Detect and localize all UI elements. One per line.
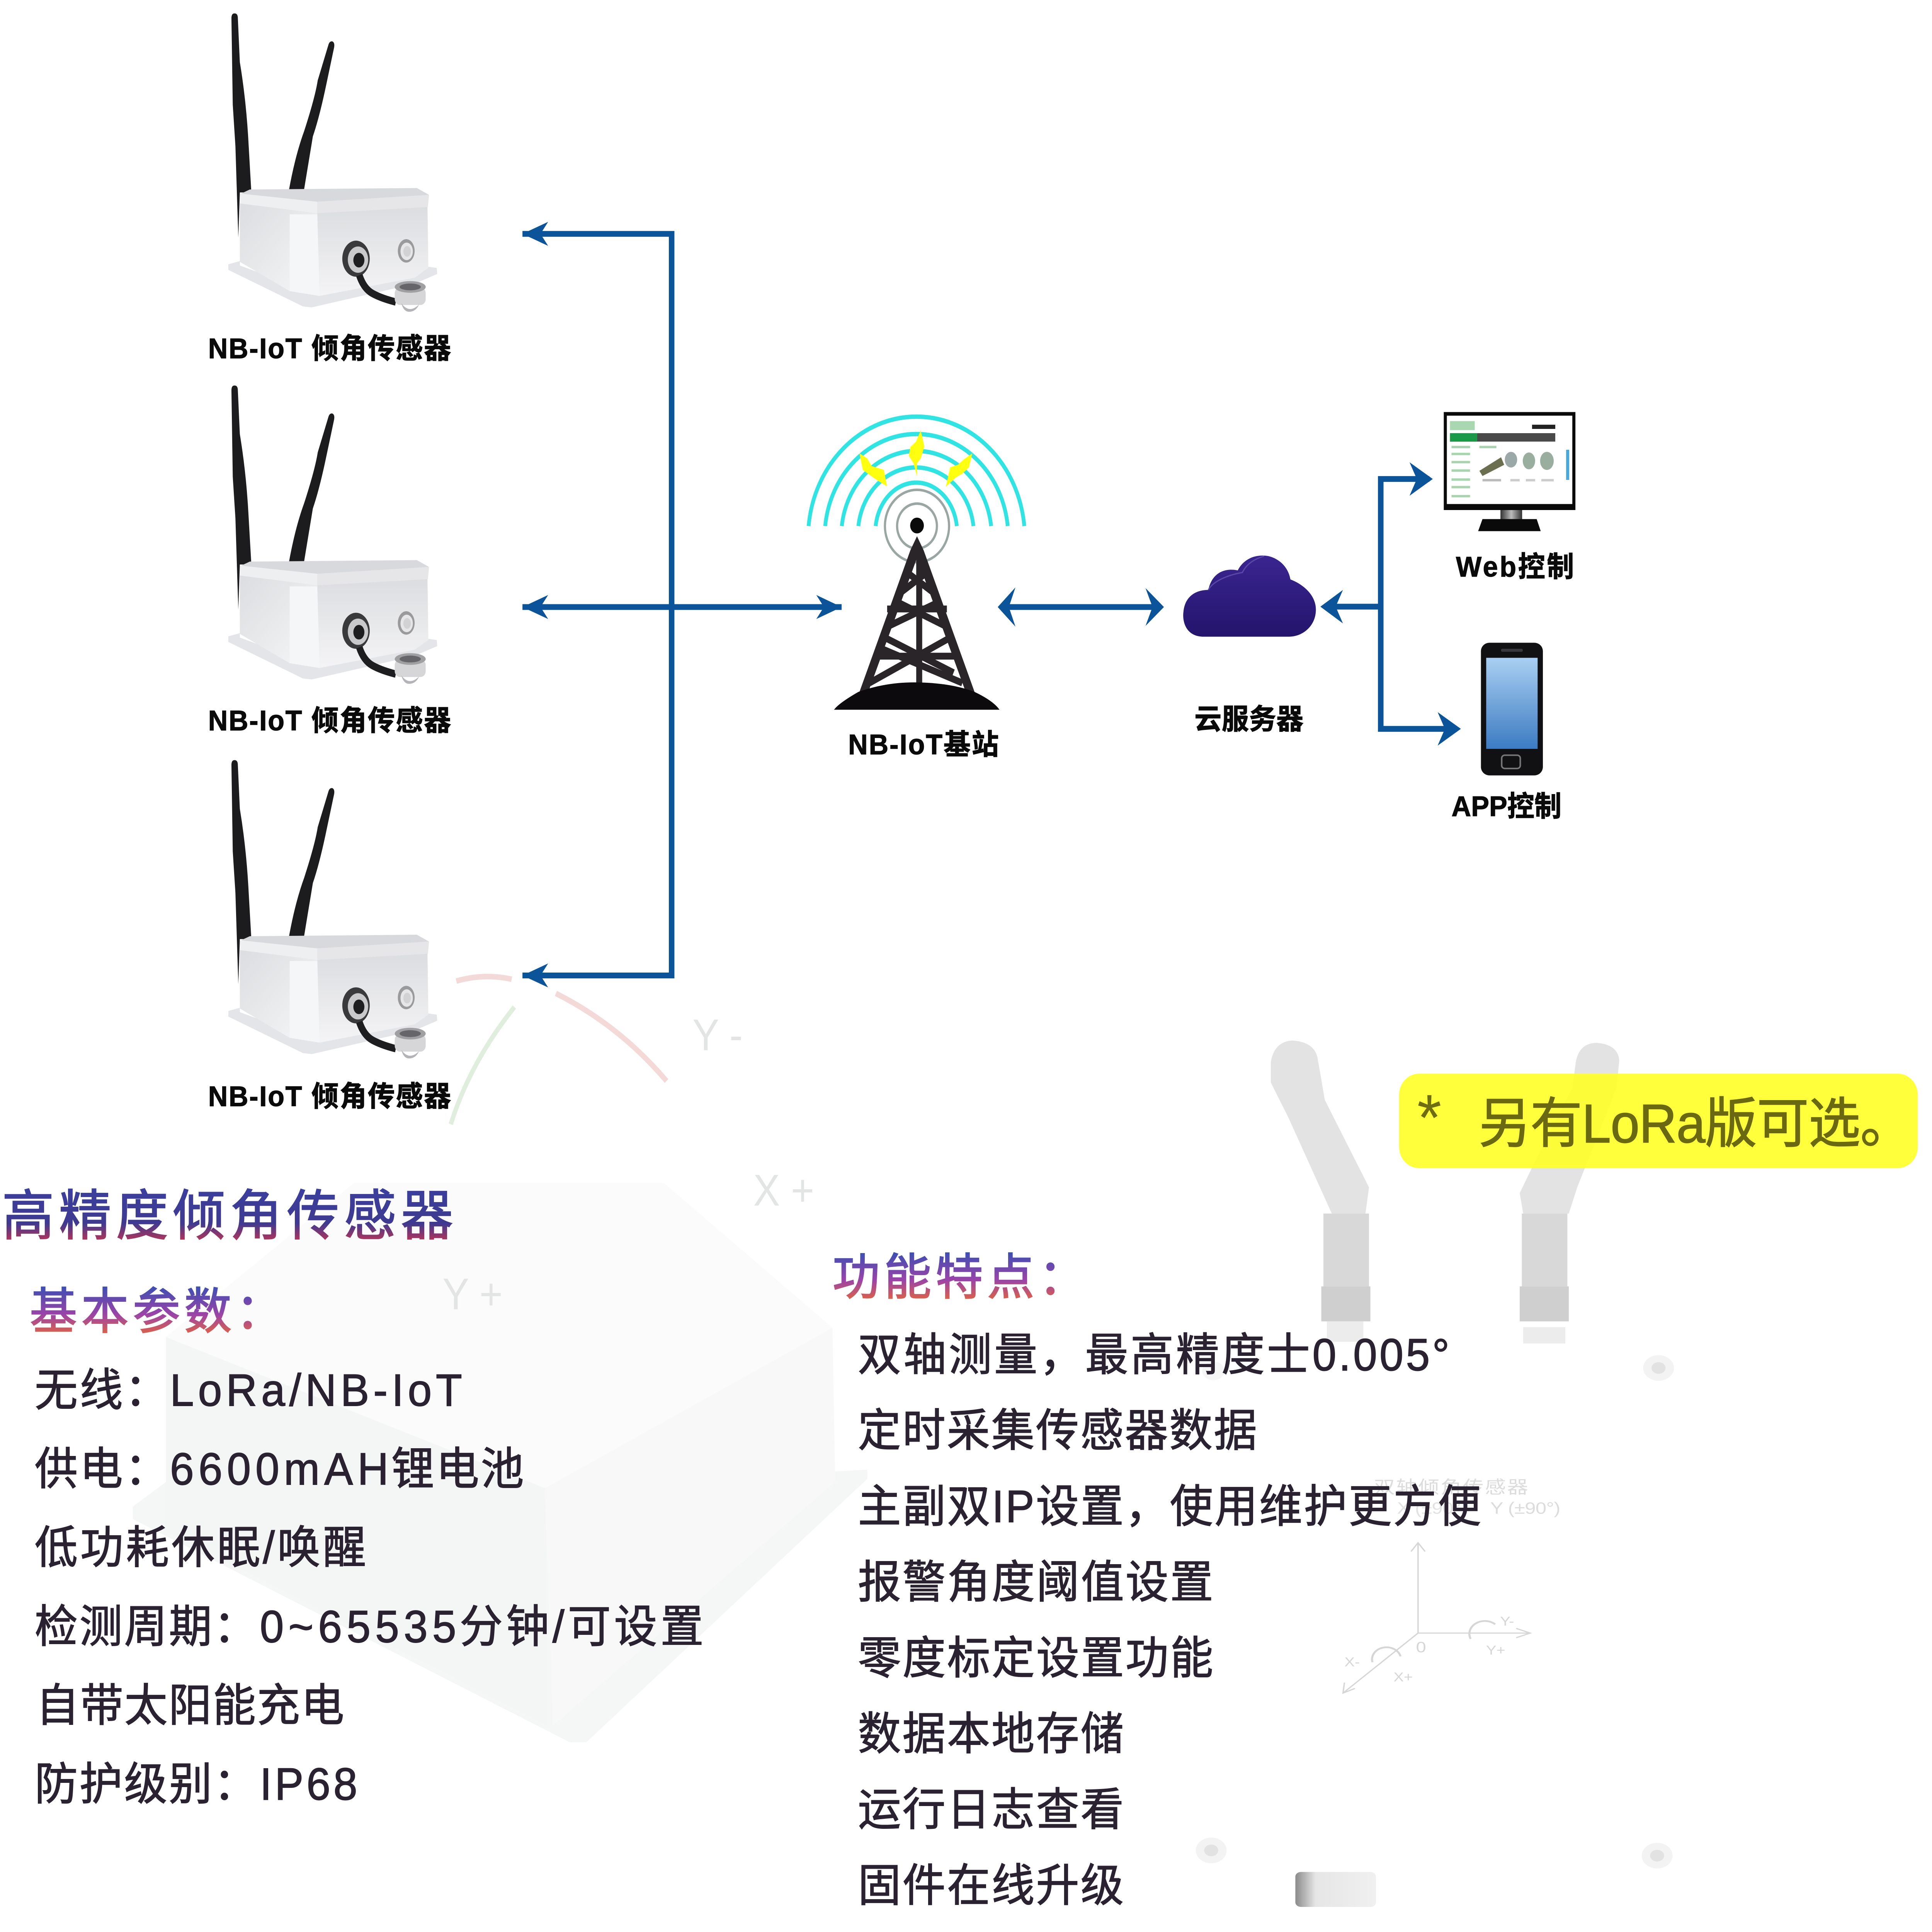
icon: sensor 3 (228, 760, 437, 1058)
faded background: sensor with axis arcs (133, 976, 867, 1742)
arrow: base station to cloud (998, 587, 1164, 627)
spec: low power: 低功耗休眠/唤醒 (35, 1523, 366, 1573)
icon: smartphone (1481, 643, 1543, 776)
faded background: sensor front view with antennas: 双轴倾角传感器 (1374, 1478, 1528, 1497)
panel: features (833, 1250, 1481, 1911)
feature: timed collection: 定时采集传感器数据 (858, 1406, 1257, 1456)
faded background: sensor with axis arcs: X + (753, 1166, 814, 1215)
arrows: cloud to web and app (1320, 462, 1461, 746)
feature: dual axis: 双轴测量，最高精度士0.005° (858, 1330, 1449, 1380)
spec: detection cycle: 检测周期： (35, 1602, 257, 1652)
arrows: sensors to base station (522, 222, 842, 988)
callout: LoRa version available (1399, 1074, 1918, 1168)
spec: detection cycle: 分钟/可设置 (460, 1602, 704, 1652)
faded background: sensor front view with antennas: Y- (1500, 1614, 1514, 1628)
feature: zero calibration: 零度标定设置功能 (858, 1633, 1213, 1684)
spec: detection cycle (35, 1602, 704, 1652)
spec: wireless (35, 1366, 462, 1416)
heading: basic parameters: 基本参数： (30, 1284, 283, 1339)
spec: wireless: LoRa/NB-IoT (170, 1366, 462, 1416)
faded background: sensor front view with antennas: X- (1344, 1655, 1360, 1669)
spec: solar: 自带太阳能充电 (36, 1681, 344, 1731)
spec: detection cycle: 0~65535 (260, 1602, 456, 1652)
faded background: sensor front view with antennas (1196, 1041, 1674, 1907)
feature: alarm threshold: 报警角度阈值设置 (858, 1558, 1213, 1608)
spec: wireless: 无线： (35, 1366, 168, 1416)
feature: local storage: 数据本地存储 (858, 1709, 1124, 1759)
icon: sensor 1 (228, 14, 437, 312)
icon: cloud server (1183, 556, 1316, 637)
heading: features: 功能特点： (833, 1250, 1086, 1305)
feature: firmware upgrade: 固件在线升级 (858, 1861, 1124, 1911)
label: web control: Web控制 (1456, 551, 1574, 583)
spec: protection: IP68 (260, 1759, 357, 1810)
spec: power: 锂电池 (391, 1444, 524, 1495)
icon: sensor 2 (228, 386, 437, 684)
spec: protection (35, 1759, 357, 1810)
feature: run log: 运行日志查看 (858, 1785, 1124, 1835)
callout: LoRa version available: * (1417, 1081, 1442, 1155)
spec: power: 供电： (35, 1444, 168, 1495)
spec: protection: 防护级别： (35, 1759, 257, 1810)
spec: power (35, 1444, 524, 1495)
callout: LoRa version available: 另有LoRa版可选。 (1479, 1094, 1912, 1154)
faded background: sensor with axis arcs: Y + (442, 1269, 503, 1319)
feature: dual IP: 主副双IP设置，使用维护更方便 (858, 1482, 1481, 1532)
faded background: sensor front view with antennas: 0 (1416, 1639, 1426, 1656)
icon: web monitor (1444, 412, 1575, 531)
title: 高精度倾角传感器 (2, 1186, 453, 1247)
label: sensor 1: NB-IoT 倾角传感器 (208, 333, 451, 365)
label: sensor 3: NB-IoT 倾角传感器 (208, 1081, 451, 1112)
label: app control: APP控制 (1452, 791, 1561, 823)
spec: power: 6600mAH (170, 1444, 389, 1495)
label: base station: NB-IoT基站 (848, 729, 999, 761)
faded background: sensor front view with antennas: X (±90°) (1397, 1499, 1467, 1517)
icon: NB-IoT base station tower (809, 417, 1024, 710)
faded background: sensor with axis arcs: Y - (692, 1010, 743, 1060)
faded background: sensor front view with antennas: Y+ (1486, 1643, 1505, 1657)
faded background: sensor front view with antennas: Y (±90°) (1490, 1499, 1560, 1517)
label: sensor 2: NB-IoT 倾角传感器 (208, 705, 451, 736)
panel: basic parameters (30, 1284, 704, 1810)
label: cloud server: 云服务器 (1194, 704, 1303, 735)
faded background: sensor front view with antennas: X+ (1393, 1670, 1413, 1684)
